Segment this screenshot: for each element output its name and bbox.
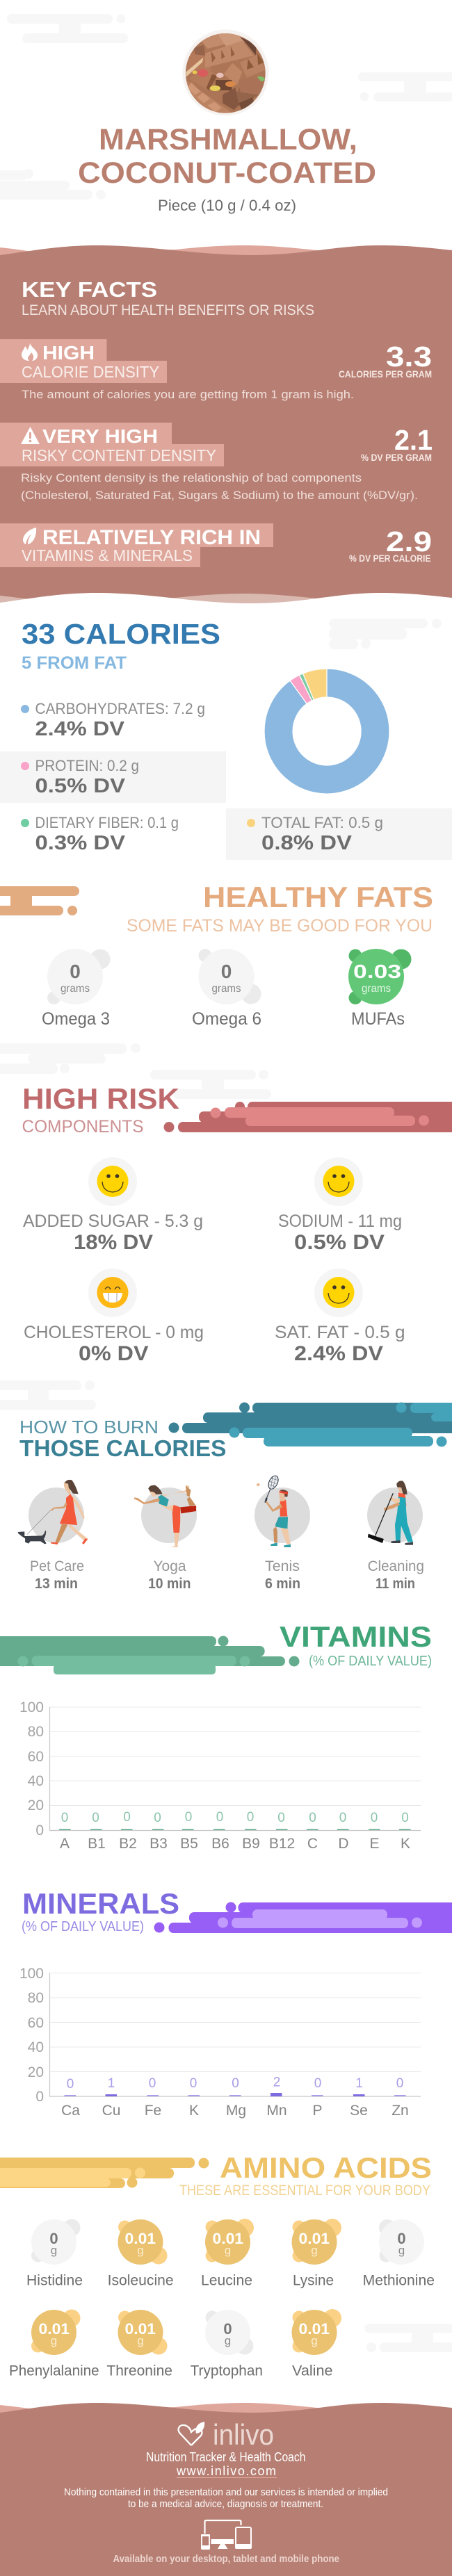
- amino: phenylalanine: 0.01: [39, 2320, 70, 2338]
- fat: MUFAs: [348, 949, 412, 1029]
- bar chart: vitamins: 0: [309, 1811, 316, 1825]
- decorative header shape: [0, 886, 79, 915]
- bar chart: minerals: Mn: [266, 2103, 287, 2119]
- heading: healthy fats: SOME FATS MAY BE GOOD FOR YOU: [127, 916, 433, 936]
- heading: high risk: COMPONENTS: [22, 1117, 143, 1136]
- legend: total fat: TOTAL FAT: 0.5 g: [261, 814, 383, 831]
- bar chart: vitamins: 0: [371, 1811, 378, 1825]
- bar chart: minerals: 100: [19, 1966, 44, 1982]
- bar chart: minerals: 40: [28, 2039, 44, 2055]
- logo: inlivo: [179, 2418, 274, 2451]
- heading: burn calories: THOSE CALORIES: [19, 1435, 227, 1461]
- amino: phenylalanine: Phenylalanine: [9, 2363, 99, 2379]
- disclaimer: [64, 2486, 388, 2510]
- heading: minerals: [22, 1887, 179, 1934]
- fact: vitamins and minerals: % DV PER CALORIE: [349, 553, 431, 564]
- fact: risky content density: % DV PER GRAM: [361, 453, 432, 463]
- amino: lysine: [292, 2219, 341, 2288]
- amino: valine: g: [311, 2334, 318, 2347]
- fat: MUFAs: MUFAs: [351, 1009, 405, 1029]
- amino: lysine: Lysine: [293, 2273, 334, 2288]
- bar chart: minerals: 0: [190, 2076, 197, 2091]
- heading: healthy fats: HEALTHY FATS: [203, 881, 433, 913]
- bar chart: vitamins: B6: [211, 1836, 229, 1852]
- fact: vitamins and minerals: [0, 523, 432, 567]
- legend: protein: PROTEIN: 0.2 g: [35, 757, 139, 774]
- bar chart: vitamins: [19, 1699, 421, 1852]
- heading: vitamins: VITAMINS: [280, 1620, 432, 1653]
- heading: amino acids: [179, 2151, 432, 2199]
- amino: valine: 0.01: [299, 2320, 330, 2338]
- fact: risky content density: VERY HIGH: [42, 425, 158, 447]
- heading: healthy fats: [127, 881, 433, 936]
- amino: leucine: Leucine: [201, 2273, 252, 2288]
- bar chart: vitamins: 100: [19, 1699, 44, 1715]
- risk: saturated fat: 2.4% DV: [294, 1342, 383, 1365]
- bar chart: vitamins: 0: [277, 1811, 285, 1825]
- bar chart: minerals: 1: [108, 2076, 115, 2091]
- activity: tennis: [255, 1474, 310, 1592]
- amino: phenylalanine: g: [51, 2334, 57, 2347]
- amino: isoleucine: g: [137, 2244, 144, 2257]
- fact: calorie density: CALORIES PER GRAM: [339, 369, 432, 380]
- fact: calorie density: CALORIE DENSITY: [22, 363, 159, 381]
- food photo: chocolate pieces: [182, 29, 269, 117]
- bar chart: vitamins: 0: [185, 1810, 192, 1825]
- fact: risky content density: [0, 423, 433, 502]
- fact: risky content density: 2.1: [394, 424, 433, 456]
- bar chart: vitamins: B5: [180, 1836, 198, 1852]
- bar chart: minerals: Ca: [61, 2103, 80, 2119]
- panel: vitamins: [0, 1620, 432, 1852]
- fat: omega 3: Omega 3: [42, 1009, 110, 1029]
- legend: carbohydrates: CARBOHYDRATES: 7.2 g: [35, 700, 205, 717]
- risk: sodium: [278, 1157, 402, 1254]
- fact: calorie density: The amount of calories you are getting from 1 gram is high.: [22, 388, 354, 401]
- bar chart: minerals: 0: [314, 2076, 321, 2091]
- risk: added sugar: 18% DV: [74, 1231, 153, 1254]
- bar chart: minerals: 0: [67, 2077, 74, 2092]
- legend backgrounds: [0, 751, 452, 860]
- bar chart: minerals: P: [312, 2103, 323, 2119]
- amino: tryptophan: 0: [223, 2320, 232, 2338]
- fact: risky content density: (Cholesterol, Saturated Fat, Sugars & Sodium) to the amount (%DV/gr).: [21, 489, 418, 502]
- amino: histidine: 0: [49, 2230, 58, 2247]
- fact: calorie density: 3.3: [386, 341, 432, 373]
- bar chart: vitamins: D: [338, 1836, 349, 1852]
- bar chart: minerals: 0: [149, 2076, 156, 2091]
- amino: isoleucine: Isoleucine: [108, 2273, 174, 2288]
- risk: cholesterol: 0% DV: [79, 1342, 149, 1365]
- heading: vitamins: [280, 1620, 432, 1669]
- fat: MUFAs: grams: [362, 983, 391, 995]
- tagline and website: [146, 2450, 306, 2478]
- bar chart: vitamins: B2: [119, 1836, 137, 1852]
- legend: protein: [21, 757, 139, 797]
- bar chart: vitamins: 0: [123, 1810, 131, 1825]
- activity: cleaning: 11 min: [376, 1576, 415, 1592]
- amino: methionine: Methionine: [363, 2273, 435, 2288]
- bar chart: vitamins: B1: [88, 1836, 106, 1852]
- heading: high risk: HIGH RISK: [22, 1082, 179, 1115]
- amino: leucine: g: [225, 2244, 231, 2257]
- fat: omega 3: [42, 949, 110, 1029]
- amino: valine: Valine: [292, 2363, 332, 2379]
- amino: leucine: [201, 2219, 254, 2288]
- panel: amino acids: [0, 2151, 435, 2379]
- fat: MUFAs: 0.03: [353, 961, 401, 982]
- bar chart: vitamins: 0: [154, 1811, 161, 1825]
- disclaimer: Nothing contained in this presentation and our services is intended or implied: [64, 2486, 388, 2498]
- bar chart: minerals: [19, 1966, 421, 2119]
- bar chart: vitamins: 0: [216, 1810, 223, 1825]
- legend: carbohydrates: 2.4% DV: [35, 718, 125, 740]
- heading: calories: 5 FROM FAT: [22, 653, 127, 673]
- amino: tryptophan: g: [225, 2334, 231, 2347]
- bar chart: minerals: 2: [273, 2076, 280, 2089]
- risk: sodium: SODIUM - 11 mg: [278, 1212, 402, 1231]
- panel: minerals: [19, 1887, 452, 2119]
- bar chart: vitamins: E: [369, 1836, 380, 1852]
- bar chart: vitamins: 0: [35, 1823, 44, 1839]
- bar chart: minerals: 0: [396, 2076, 403, 2091]
- risk: saturated fat: [275, 1269, 405, 1365]
- fact: calorie density: HIGH: [42, 342, 95, 364]
- activity: tennis: 6 min: [265, 1576, 300, 1592]
- bar chart: vitamins: B12: [269, 1836, 295, 1852]
- legend: dietary fiber: 0.3% DV: [35, 832, 126, 854]
- amino: threonine: [106, 2310, 172, 2379]
- amino: isoleucine: [108, 2219, 174, 2288]
- risk: saturated fat: SAT. FAT - 0.5 g: [275, 1323, 405, 1342]
- decorative header shape: [164, 1102, 452, 1132]
- risk: added sugar: ADDED SUGAR - 5.3 g: [23, 1212, 203, 1231]
- amino: methionine: 0: [397, 2230, 406, 2247]
- activity: yoga: [134, 1485, 197, 1592]
- disclaimer: to be a medical advice, diagnosis or treatment.: [128, 2498, 323, 2510]
- heading: amino acids: AMINO ACIDS: [220, 2151, 432, 2184]
- bar chart: vitamins: K: [401, 1836, 410, 1852]
- fact: risky content density: RISKY CONTENT DENSITY: [22, 446, 216, 464]
- amino: threonine: Threonine: [106, 2363, 172, 2379]
- bar chart: minerals: 0: [35, 2089, 44, 2105]
- title: COCONUT-COATED: [78, 156, 376, 190]
- bar chart: minerals: Mg: [226, 2103, 246, 2119]
- bar chart: minerals: 1: [355, 2076, 363, 2091]
- bar chart: minerals: 20: [28, 2064, 44, 2080]
- panel: calories: [0, 618, 452, 860]
- fact: vitamins and minerals: RELATIVELY RICH IN: [42, 526, 261, 549]
- amino: lysine: 0.01: [299, 2230, 330, 2247]
- bar chart: minerals: Se: [350, 2103, 368, 2119]
- bar chart: vitamins: 0: [92, 1811, 99, 1825]
- risk: added sugar: [23, 1157, 203, 1254]
- decorative header shape: [0, 1636, 299, 1674]
- amino: threonine: 0.01: [125, 2320, 156, 2338]
- amino: leucine: 0.01: [213, 2230, 243, 2247]
- heading: high risk: [22, 1082, 179, 1136]
- amino: threonine: g: [137, 2334, 144, 2347]
- bar chart: vitamins: 60: [28, 1749, 44, 1765]
- bar chart: vitamins: B3: [150, 1836, 168, 1852]
- amino: methionine: [363, 2219, 435, 2288]
- amino: histidine: g: [51, 2244, 57, 2257]
- bar chart: vitamins: C: [307, 1836, 318, 1852]
- heading: minerals: MINERALS: [22, 1887, 179, 1920]
- heading: key facts: LEARN ABOUT HEALTH BENEFITS OR RISKS: [22, 302, 314, 318]
- activity: yoga: Yoga: [153, 1558, 186, 1574]
- amino: tryptophan: Tryptophan: [191, 2363, 263, 2379]
- activity: pet care: [18, 1480, 88, 1592]
- legend: total fat: 0.8% DV: [261, 832, 353, 854]
- decorative header shape: [168, 1403, 452, 1447]
- decorative header shape: [0, 2158, 209, 2188]
- activity: yoga: 10 min: [148, 1576, 191, 1592]
- bar chart: minerals: Cu: [102, 2103, 120, 2119]
- panel: high risk components: [22, 1082, 452, 1365]
- bar chart: vitamins: 0: [401, 1811, 409, 1825]
- heading: calories: 33 CALORIES: [22, 618, 220, 650]
- heading: minerals: (% OF DAILY VALUE): [22, 1919, 144, 1934]
- legend: dietary fiber: [21, 814, 179, 854]
- bar chart: minerals: 80: [28, 1990, 44, 2006]
- fat: omega 3: grams: [60, 983, 90, 995]
- tagline and website: www.inlivo.com: [176, 2464, 276, 2478]
- panel: how to burn those calories: [18, 1403, 452, 1592]
- amino: phenylalanine: [9, 2309, 99, 2379]
- heading: burn calories: [19, 1417, 227, 1461]
- bar chart: vitamins: 40: [28, 1773, 44, 1789]
- bar chart: vitamins: 0: [339, 1811, 346, 1825]
- bar chart: minerals: 60: [28, 2015, 44, 2031]
- bar chart: vitamins: 80: [28, 1724, 44, 1740]
- fat: omega 6: [192, 949, 261, 1029]
- fat: omega 6: 0: [221, 961, 232, 982]
- amino: histidine: Histidine: [26, 2273, 83, 2288]
- legend: total fat: [247, 814, 383, 854]
- logo: inlivo: inlivo: [213, 2418, 274, 2451]
- activity: pet care: Pet Care: [30, 1558, 84, 1574]
- amino: tryptophan: [191, 2310, 263, 2379]
- activity: tennis: Tenis: [265, 1558, 300, 1574]
- amino: valine: [292, 2309, 341, 2379]
- bar chart: vitamins: A: [60, 1836, 70, 1852]
- legend: carbohydrates: [21, 700, 205, 740]
- amino: methionine: g: [398, 2244, 405, 2257]
- bar chart: vitamins: 20: [28, 1798, 44, 1813]
- title: [78, 123, 376, 190]
- activity: cleaning: [367, 1481, 424, 1592]
- fact: calorie density: [0, 339, 432, 401]
- amino: isoleucine: 0.01: [125, 2230, 156, 2247]
- tagline and website: Nutrition Tracker & Health Coach: [146, 2450, 306, 2464]
- legend: dietary fiber: DIETARY FIBER: 0.1 g: [35, 814, 179, 831]
- heading: burn calories: HOW TO BURN: [19, 1417, 159, 1437]
- amino: histidine: [26, 2219, 83, 2288]
- amino: lysine: g: [311, 2244, 318, 2257]
- availability note: Available on your desktop, tablet and mobile phone: [113, 2553, 339, 2565]
- bar chart: vitamins: 0: [247, 1810, 254, 1825]
- fat: omega 6: grams: [211, 983, 241, 995]
- bar chart: minerals: 0: [232, 2076, 239, 2091]
- panel: footer: [0, 2403, 452, 2576]
- icon: devices: [201, 2520, 252, 2550]
- heading: vitamins: (% OF DAILY VALUE): [309, 1654, 432, 1669]
- activity: cleaning: Cleaning: [368, 1558, 424, 1574]
- decorative header shape: [154, 1902, 452, 1933]
- heading: key facts: KEY FACTS: [22, 277, 157, 302]
- heading: calories: [22, 618, 220, 673]
- donut chart: macronutrients: [264, 669, 389, 794]
- bar chart: vitamins: 0: [61, 1811, 68, 1825]
- serving size: Piece (10 g / 0.4 oz): [158, 197, 296, 214]
- bar chart: minerals: Zn: [392, 2103, 409, 2119]
- bar chart: minerals: K: [189, 2103, 199, 2119]
- risk: sodium: 0.5% DV: [294, 1231, 385, 1254]
- bar chart: vitamins: B9: [242, 1836, 260, 1852]
- fat: omega 6: Omega 6: [192, 1009, 261, 1029]
- fact: risky content density: Risky Content density is the relationship of bad components: [21, 471, 362, 484]
- title: MARSHMALLOW,: [99, 123, 357, 156]
- panel: healthy fats: [0, 881, 433, 1029]
- risk: cholesterol: CHOLESTEROL - 0 mg: [24, 1323, 204, 1342]
- heading: key facts: [22, 277, 314, 318]
- bar chart: minerals: Fe: [145, 2103, 161, 2119]
- panel: key facts: [0, 245, 452, 615]
- fact: vitamins and minerals: 2.9: [386, 525, 432, 557]
- fat: omega 3: 0: [70, 961, 81, 982]
- legend: protein: 0.5% DV: [35, 775, 126, 797]
- fact: vitamins and minerals: VITAMINS & MINERALS: [22, 546, 193, 564]
- risk: cholesterol: [24, 1269, 204, 1365]
- activity: pet care: 13 min: [35, 1576, 78, 1592]
